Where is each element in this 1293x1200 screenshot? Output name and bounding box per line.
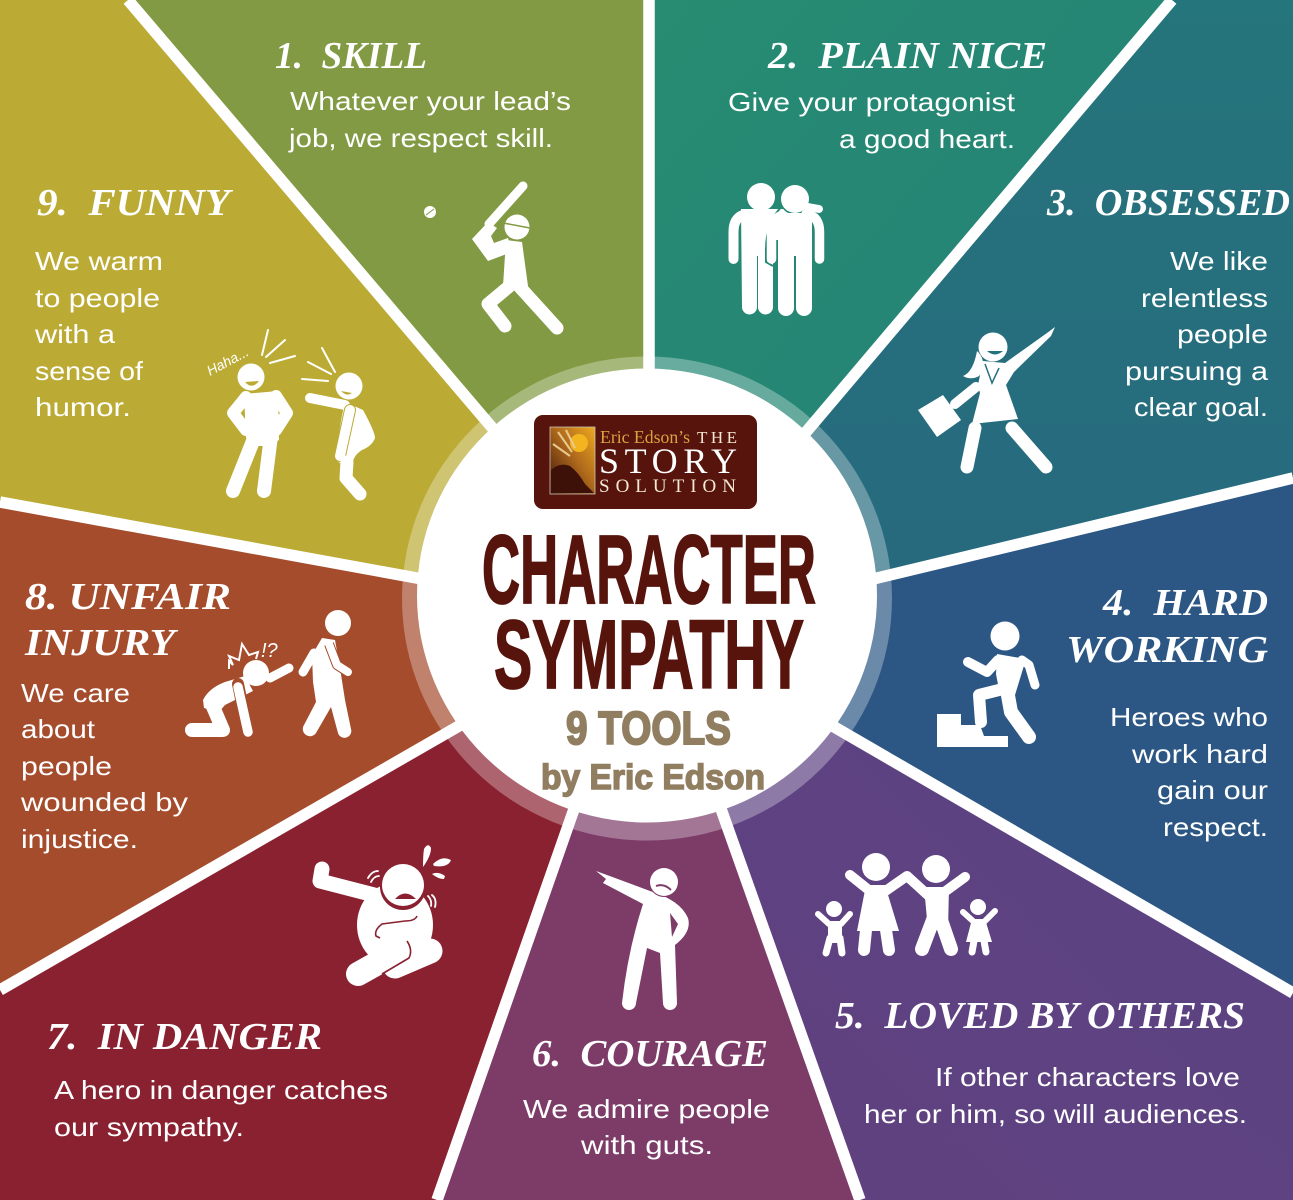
text: hard working description: work hard	[1131, 739, 1268, 769]
text: unfair injury description: We care	[21, 678, 130, 708]
text: funny description	[34, 246, 163, 422]
text: funny description: to people	[35, 283, 160, 313]
wedge: obsessed	[647, 0, 1293, 600]
icon: brave pointing figure	[596, 867, 689, 1010]
wedge: in danger	[0, 600, 647, 1200]
wedge: skill	[128, 0, 649, 600]
heading: 9. funny: 9. FUNNY	[37, 182, 234, 224]
center circle	[417, 368, 877, 822]
logo: The Story Solution: THE	[697, 428, 737, 447]
heading: 8. unfair injury: INJURY	[24, 622, 179, 664]
heading: 7. in danger: 7. IN DANGER	[47, 1016, 322, 1058]
wedge: loved by others	[647, 600, 1293, 1200]
text: funny description: sense of	[35, 356, 144, 386]
text: obsessed description: people	[1177, 319, 1268, 349]
heading: 5. loved by others: 5. LOVED BY OTHERS	[835, 995, 1245, 1037]
wedge: courage	[437, 600, 860, 1200]
icon: two friends	[734, 183, 820, 316]
text: plain nice description: a good heart.	[839, 124, 1015, 154]
heading: 2. plain nice: 2. PLAIN NICE	[767, 35, 1047, 77]
icon: injured person and walker: !?	[261, 640, 279, 662]
logo: The Story Solution	[534, 415, 757, 509]
panel: 7 in danger	[0, 600, 647, 1200]
text: courage description	[523, 1094, 770, 1160]
text: skill description	[288, 86, 571, 153]
text: obsessed description: We like	[1170, 246, 1268, 276]
icon: frightened crouching figure	[320, 845, 451, 974]
logo: The Story Solution: SOLUTION	[599, 476, 736, 497]
icon: climbing stairs	[937, 622, 1035, 747]
text: in danger description	[54, 1075, 388, 1142]
icon: family	[818, 853, 995, 953]
text: skill description: Whatever your lead’s	[290, 86, 571, 116]
text: unfair injury description: people	[21, 751, 112, 781]
subtitle	[541, 702, 765, 797]
text: in danger description: our sympathy.	[54, 1112, 244, 1142]
panel: 4 hard working	[647, 478, 1293, 993]
icon: injured person and walker	[192, 610, 351, 738]
text: unfair injury description: injustice.	[21, 824, 138, 854]
heading: 4. hard working	[1066, 582, 1269, 671]
icon: laughing and pointing figures: Haha...	[204, 343, 251, 379]
logo: The Story Solution: Eric Edson’s	[600, 427, 690, 447]
icon: baseball batter	[424, 186, 557, 328]
text: plain nice description	[728, 87, 1016, 154]
text: loved by others description: If other characters love	[935, 1062, 1240, 1092]
panel: 2 plain nice	[647, 0, 1172, 600]
panel: 5 loved by others	[647, 600, 1293, 1200]
panel: 9 funny	[0, 0, 647, 600]
panel: 1 skill	[128, 0, 649, 600]
text: unfair injury description: about	[21, 714, 96, 744]
text: funny description: with a	[34, 319, 116, 349]
panel: 8 unfair injury	[0, 502, 647, 990]
wedge: plain nice	[647, 0, 1172, 600]
heading: 4. hard working: WORKING	[1066, 629, 1269, 671]
heading: 3. obsessed: 3. OBSESSED	[1046, 182, 1290, 224]
text: unfair injury description: wounded by	[20, 787, 188, 817]
text: skill description: job, we respect skill.	[288, 123, 553, 153]
text: hard working description: respect.	[1163, 812, 1268, 842]
text: hard working description: gain our	[1157, 775, 1268, 805]
text: courage description: with guts.	[580, 1130, 713, 1160]
text: in danger description: A hero in danger catches	[54, 1075, 388, 1105]
text: obsessed description: clear goal.	[1134, 392, 1268, 422]
subtitle: by Eric Edson	[541, 758, 765, 797]
title: SYMPATHY	[494, 600, 804, 709]
text: plain nice description: Give your protagonist	[728, 87, 1016, 117]
title: CHARACTER	[482, 515, 816, 624]
text: unfair injury description	[20, 678, 188, 854]
heading: 8. unfair injury: 8. UNFAIR	[25, 576, 231, 618]
text: obsessed description	[1125, 246, 1269, 422]
icon: businesswoman pointing	[918, 327, 1055, 467]
heading: 6. courage: 6. COURAGE	[532, 1033, 768, 1075]
heading: 4. hard working: 4. HARD	[1102, 582, 1268, 624]
ring: translucent halo	[402, 356, 892, 840]
text: hard working description	[1110, 702, 1268, 842]
heading: 1. skill: 1. SKILL	[275, 35, 427, 77]
icon: laughing and pointing figures	[204, 330, 375, 494]
text: hard working description: Heroes who	[1110, 702, 1268, 732]
text: obsessed description: pursuing a	[1125, 356, 1269, 386]
subtitle: 9 TOOLS	[566, 702, 731, 754]
logo cover image	[550, 427, 595, 494]
text: loved by others description	[864, 1062, 1247, 1129]
panel: 3 obsessed	[647, 0, 1293, 600]
wedge: hard working	[647, 478, 1293, 993]
title	[482, 515, 816, 709]
text: funny description: humor.	[35, 392, 131, 422]
logo: The Story Solution: STORY	[599, 441, 737, 481]
text: obsessed description: relentless	[1141, 283, 1268, 313]
panel: 6 courage	[437, 600, 860, 1200]
text: loved by others description: her or him, so will audiences.	[864, 1099, 1247, 1129]
heading: 8. unfair injury	[24, 576, 231, 664]
text: courage description: We admire people	[523, 1094, 770, 1124]
wedge: unfair injury	[0, 502, 647, 990]
wedge: funny	[0, 0, 647, 600]
text: funny description: We warm	[35, 246, 163, 276]
